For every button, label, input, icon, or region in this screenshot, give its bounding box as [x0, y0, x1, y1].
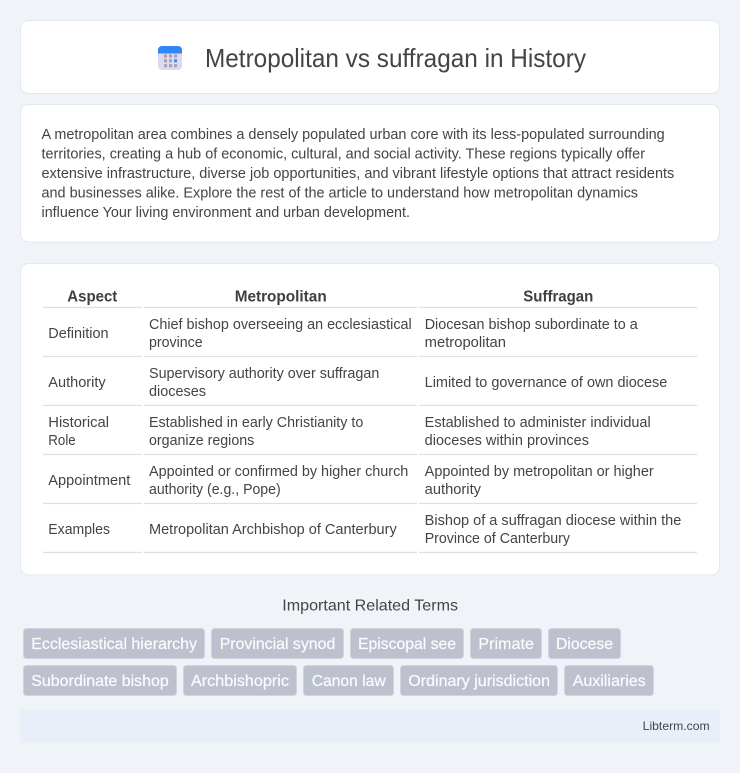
table row: historical role: Historical: [48, 415, 109, 431]
table row: examples: Metropolitan Archbishop of Canterbury: [149, 522, 398, 538]
tag: Archbishopric: Archbishopric: [191, 673, 289, 690]
table row: historical role: Established in early Christianity to: [149, 415, 363, 431]
table row: historical role: Established to administer individual: [425, 415, 651, 431]
table row: authority: [48, 366, 667, 400]
table row: examples: Bishop of a suffragan diocese within the: [425, 513, 681, 529]
table header row: Aspect: [67, 289, 117, 306]
table row: examples: Province of Canterbury: [425, 531, 571, 547]
text block: intro: [42, 127, 674, 221]
table row: historical role: Role: [48, 433, 76, 449]
text block: intro: influence Your living environment and urban development.: [42, 205, 410, 221]
tag: Subordinate bishop: [24, 666, 176, 696]
tag: Archbishopric: [184, 666, 296, 696]
table row: historical role: dioceses within provinces: [425, 433, 589, 449]
heading: related terms: Important Related Terms: [282, 598, 458, 614]
tag: Primate: [470, 628, 542, 658]
tag: Ecclesiastical hierarchy: Ecclesiastical hierarchy: [31, 636, 197, 653]
title: Metropolitan vs suffragan in History: [205, 45, 586, 73]
tag: Ordinary jurisdiction: [400, 666, 558, 696]
table header row: [67, 289, 593, 306]
text block: intro: A metropolitan area combines a densely populated urban core with its less-populated surrounding: [42, 127, 665, 143]
table row: definition: metropolitan: [425, 335, 506, 351]
table row: examples: Examples: [48, 522, 110, 538]
tag: Episcopal see: [350, 628, 464, 658]
table row: authority: dioceses: [149, 384, 206, 400]
text block: intro: territories, creating a hub of economic, cultural, and social activity. These regions typically offer: [42, 146, 645, 162]
table row: appointment: Appointed or confirmed by higher church: [149, 464, 408, 480]
tag: Canon law: [304, 666, 394, 696]
table row: appointment: authority (e.g., Pope): [149, 482, 281, 498]
table row: definition: Diocesan bishop subordinate to a: [425, 317, 638, 333]
table row: definition: [48, 317, 638, 351]
text block: intro: extensive infrastructure, diverse job opportunities, and vibrant lifestyle options that attract residents: [42, 166, 674, 182]
table row: authority: Limited to governance of own diocese: [425, 375, 667, 391]
text block: intro: and businesses alike. Explore the rest of the article to understand how metropolitan dynamics: [42, 186, 638, 202]
table row: definition: Chief bishop overseeing an ecclesiastical: [149, 317, 412, 333]
tag: Provincial synod: [212, 628, 344, 658]
tag: Canon law: Canon law: [312, 673, 386, 690]
table header row: Metropolitan: [235, 289, 327, 306]
panel: intro paragraph: [20, 104, 720, 242]
table row: appointment: authority: [425, 482, 482, 498]
table row: historical role: organize regions: [149, 433, 254, 449]
table row: authority: Authority: [48, 375, 107, 391]
tag: Auxiliaries: [564, 666, 654, 696]
tag: Episcopal see: Episcopal see: [358, 636, 456, 653]
footer credit: Libterm.com: [643, 719, 710, 733]
tag: Ecclesiastical hierarchy: [24, 628, 204, 658]
table row: definition: Definition: [48, 326, 109, 342]
icon: calendar: [158, 46, 182, 70]
tag: Subordinate bishop: Subordinate bishop: [31, 673, 169, 690]
tag: Auxiliaries: Auxiliaries: [573, 673, 646, 690]
table row: historical role: [48, 415, 651, 449]
panel: comparison table: [20, 264, 720, 575]
tag: Diocese: Diocese: [556, 636, 613, 653]
panel: header: [20, 20, 720, 94]
table row: authority: Supervisory authority over suffragan: [149, 366, 379, 382]
table row: examples: [48, 513, 681, 547]
table row: appointment: Appointment: [48, 473, 130, 489]
table row: appointment: Appointed by metropolitan or higher: [425, 464, 654, 480]
tag: Ordinary jurisdiction: Ordinary jurisdiction: [408, 673, 550, 690]
tag: Primate: Primate: [478, 636, 534, 653]
footer: [20, 710, 720, 743]
tag: Diocese: [548, 628, 620, 658]
tags: related terms: [24, 628, 654, 696]
tag: Provincial synod: Provincial synod: [220, 636, 335, 653]
table row: definition: province: [149, 335, 203, 351]
table header row: Suffragan: [523, 289, 593, 306]
table row: appointment: [48, 464, 654, 498]
